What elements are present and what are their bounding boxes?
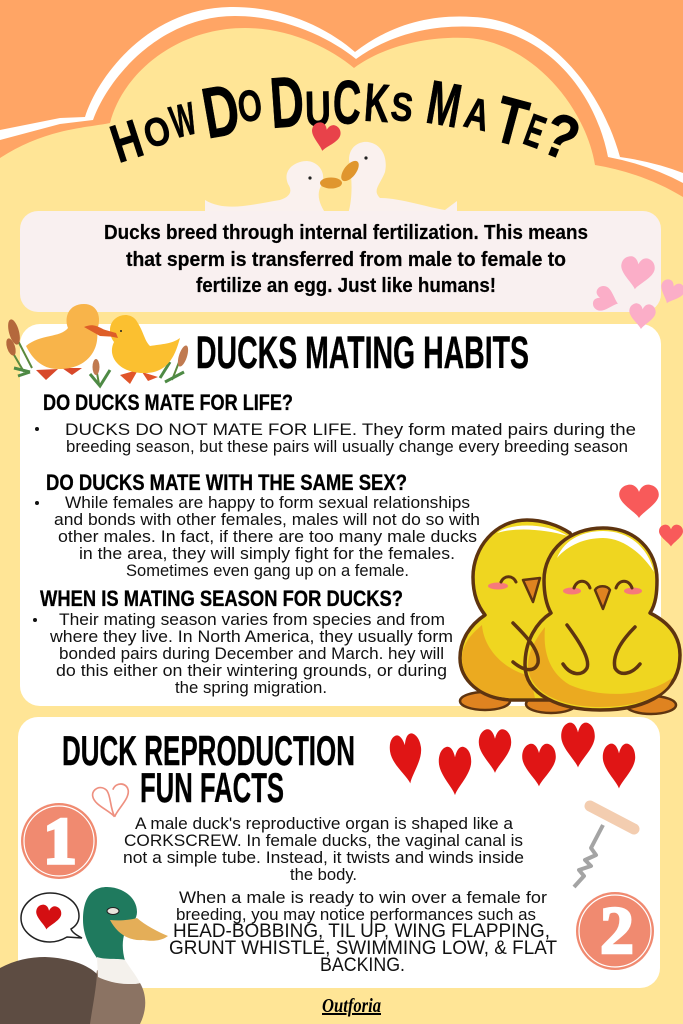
feet: [460, 692, 676, 714]
title: How Do Ducks Mate?: K: [362, 72, 392, 134]
section: same sex: [35, 470, 480, 580]
title: How Do Ducks Mate?: M: [422, 68, 466, 142]
fact two text: HEAD-BOBBING, TIL UP, WING FLAPPING,: [173, 921, 550, 942]
right duckling: [102, 315, 180, 384]
beak: [110, 918, 168, 941]
illustration: mallard duck: [0, 887, 168, 1024]
white neck ring: [97, 957, 140, 984]
front chick: [513, 528, 680, 710]
title: How Do Ducks Mate?: O: [235, 81, 265, 133]
intro text: fertilize an egg. Just like humans!: [196, 275, 496, 297]
chest: [88, 970, 145, 1024]
fact two text: BACKING.: [320, 955, 405, 976]
panel: fun facts: [18, 717, 660, 988]
icon: coral hearts: [619, 485, 683, 546]
section: do ducks mate for life: DUCKS DO NOT MATE FOR LIFE. They form mated pairs during the: [65, 420, 636, 439]
section: do ducks mate for life: [35, 390, 636, 456]
fact two text: When a male is ready to win over a female for: [179, 888, 547, 907]
section: do ducks mate for life: DO DUCKS MATE FOR LIFE?: [43, 390, 293, 415]
badge: number 1: 1: [44, 805, 76, 878]
title: How Do Ducks Mate?: U: [305, 82, 331, 138]
section: same sex: and bonds with other females, males will not do so with: [54, 510, 480, 529]
title: How Do Ducks Mate?: S: [388, 83, 416, 131]
icon: outline heart: [91, 783, 132, 820]
back chick: [460, 520, 600, 700]
section: mating season: where they live. In North America, they usually form: [49, 627, 453, 646]
title: How Do Ducks Mate?: E: [518, 104, 552, 158]
left duckling: [26, 304, 118, 380]
panel: ducks mating habits: [20, 324, 661, 706]
illustration: two white swans: [205, 142, 457, 214]
illustration: two ducklings with cattails: [4, 304, 190, 386]
heading: duck reproduction fun facts: [62, 727, 355, 811]
panel: intro: [20, 211, 661, 312]
eye: [107, 908, 119, 914]
badge: number 2: [576, 892, 654, 970]
wing: [0, 957, 97, 1024]
badge: number 2: 2: [600, 892, 634, 968]
cattails: [4, 318, 190, 386]
fact one text: [123, 814, 524, 884]
section: same sex: other males. In fact, if there are too many male ducks: [58, 527, 477, 546]
title: How Do Ducks Mate?: ?: [533, 99, 589, 175]
title: How Do Ducks Mate?: D: [267, 61, 307, 143]
title: How Do Ducks Mate?: [104, 61, 589, 175]
badge: number 1: [21, 803, 97, 879]
heading: duck reproduction fun facts: DUCK REPRODUCTION: [62, 727, 355, 774]
section: do ducks mate for life: breeding season, but these pairs will usually change every breeding season: [66, 437, 628, 456]
title: How Do Ducks Mate?: C: [332, 67, 362, 137]
icon: title heart: [308, 121, 342, 154]
title: How Do Ducks Mate?: D: [196, 69, 246, 155]
section: same sex: DO DUCKS MATE WITH THE SAME SEX?: [46, 470, 407, 495]
intro text: Ducks breed through internal fertilization. This means: [104, 222, 588, 244]
fact one text: not a simple tube. Instead, it twists and winds inside: [123, 848, 524, 867]
heading: duck reproduction fun facts: FUN FACTS: [140, 764, 284, 811]
title: How Do Ducks Mate?: A: [460, 89, 494, 141]
section: same sex: Sometimes even gang up on a female.: [126, 561, 409, 580]
icon: pink hearts: [591, 255, 683, 330]
illustration: two hugging yellow chicks: [460, 520, 680, 714]
title: How Do Ducks Mate?: T: [487, 83, 535, 161]
section: mating season: Their mating season varies from species and from: [59, 610, 445, 629]
fact one text: CORKSCREW. In female ducks, the vaginal canal is: [124, 831, 523, 850]
section: same sex: While females are happy to form sexual relationships: [65, 493, 470, 512]
title: How Do Ducks Mate?: O: [138, 107, 176, 157]
logo: Outforia: Outforia: [322, 995, 381, 1017]
section: same sex: in the area, they will simply fight for the females.: [79, 544, 455, 563]
section: mating season: [33, 586, 453, 697]
icon: speech bubble with heart: [21, 893, 82, 942]
fact two text: [169, 888, 557, 976]
intro text: [104, 222, 588, 297]
intro text: that sperm is transferred from male to female to: [126, 249, 566, 271]
section: mating season: the spring migration.: [175, 678, 327, 697]
icon: row of red hearts: [388, 723, 635, 795]
fact one text: the body.: [290, 865, 357, 884]
neck and head: [83, 887, 137, 961]
fact two text: breeding, you may notice performances such as: [176, 905, 536, 924]
fact one text: A male duck's reproductive organ is shaped like a: [135, 814, 514, 833]
icon: corkscrew: [574, 806, 634, 887]
section: mating season: do this either on their wintering grounds, or during: [56, 661, 447, 680]
title: How Do Ducks Mate?: W: [165, 92, 202, 148]
title: How Do Ducks Mate?: H: [104, 109, 150, 175]
section: mating season: bonded pairs during December and March. hey will: [59, 644, 444, 663]
fact two text: GRUNT WHISTLE, SWIMMING LOW, & FLAT: [169, 938, 557, 959]
section: mating season: WHEN IS MATING SEASON FOR DUCKS?: [40, 586, 403, 611]
